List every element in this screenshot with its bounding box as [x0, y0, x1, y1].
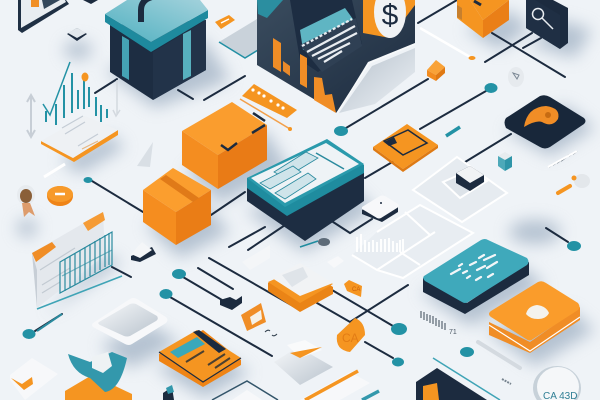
orange folder: [159, 330, 241, 387]
teal grid: [60, 232, 112, 293]
glass sheet: [219, 19, 258, 58]
teal mini cube: [498, 152, 512, 171]
marker: [82, 72, 88, 82]
small orange box: [143, 168, 211, 245]
orange tag chip: CA: [342, 331, 359, 345]
round seal: [533, 366, 581, 400]
shield: [526, 305, 549, 319]
orange badge small: CA: [352, 287, 360, 293]
seal icon: [17, 185, 35, 217]
orange bars: [273, 38, 281, 72]
swirl: [524, 106, 558, 127]
paper: [300, 18, 362, 72]
grey slider: [478, 342, 520, 368]
connectors spring icon: [548, 151, 577, 167]
axis arrows: [27, 95, 35, 137]
white trace: [420, 28, 476, 60]
data glyphs: [451, 255, 497, 280]
orange chain link: [558, 174, 590, 193]
glass monitor: [212, 381, 278, 400]
tablet top left: [18, 0, 69, 33]
analytics window: [32, 212, 122, 331]
small teal dark box: [163, 385, 174, 400]
connector lines: [35, 0, 568, 358]
orange label strip: [240, 84, 297, 131]
line chart report: [27, 62, 120, 177]
orange stripe note: [300, 371, 379, 400]
small diamond top: [83, 0, 98, 4]
center document box: [257, 0, 415, 113]
smartphone scanner: [247, 139, 364, 241]
teal dash: [446, 127, 460, 136]
white capsule: [131, 242, 156, 262]
white pad: [92, 298, 168, 345]
screen rows: [274, 152, 318, 178]
fold: [337, 44, 415, 113]
dark key piece: [456, 166, 484, 191]
barcode: [421, 311, 457, 336]
locked dark box: [105, 0, 208, 100]
teal diagonal: [433, 358, 500, 400]
teal connector dot left: [84, 177, 92, 183]
white card orange corner: [10, 358, 58, 400]
lock handle: [141, 0, 152, 22]
small white slip: [327, 256, 344, 268]
white bar chart: [357, 234, 403, 252]
teal screen: [300, 8, 355, 50]
orange cube top right: [457, 0, 509, 38]
dark swirl tile: [504, 95, 586, 148]
small pill mark: [502, 379, 511, 384]
teal data card: [423, 239, 529, 314]
orange badge small: [344, 280, 362, 297]
teal package stack: [65, 352, 132, 400]
trend line: [43, 62, 70, 115]
glass map tile: [352, 157, 507, 278]
small orange cube: [427, 60, 445, 81]
document: [41, 130, 118, 162]
dark clamp: [220, 296, 242, 310]
orange square tile: [373, 124, 438, 172]
orange tag: [215, 15, 235, 29]
orange stacked tile: [268, 263, 333, 312]
barcode: 71: [449, 329, 457, 336]
search panel: [526, 0, 568, 49]
grey dongle: [300, 238, 330, 247]
teal connector dots: [22, 83, 581, 366]
bars: [46, 73, 107, 125]
white router tile: [362, 196, 399, 222]
large orange box: [182, 102, 267, 189]
curly mark: [265, 330, 277, 336]
dark bottom box: [416, 368, 487, 400]
orange shield card: [489, 281, 580, 353]
orange note tile: [241, 303, 266, 331]
white pebble: [508, 67, 524, 87]
orange money panel: [363, 0, 415, 38]
white arrow card: [242, 245, 270, 270]
envelope: [274, 340, 333, 385]
magnifier: [532, 8, 544, 20]
ghost cone: [137, 142, 153, 167]
small diamond chip: [67, 28, 87, 41]
fold shadow: [339, 48, 415, 113]
dollar coin: [374, 0, 406, 38]
orange coin: [47, 186, 73, 206]
orange tag chip: [337, 318, 365, 352]
